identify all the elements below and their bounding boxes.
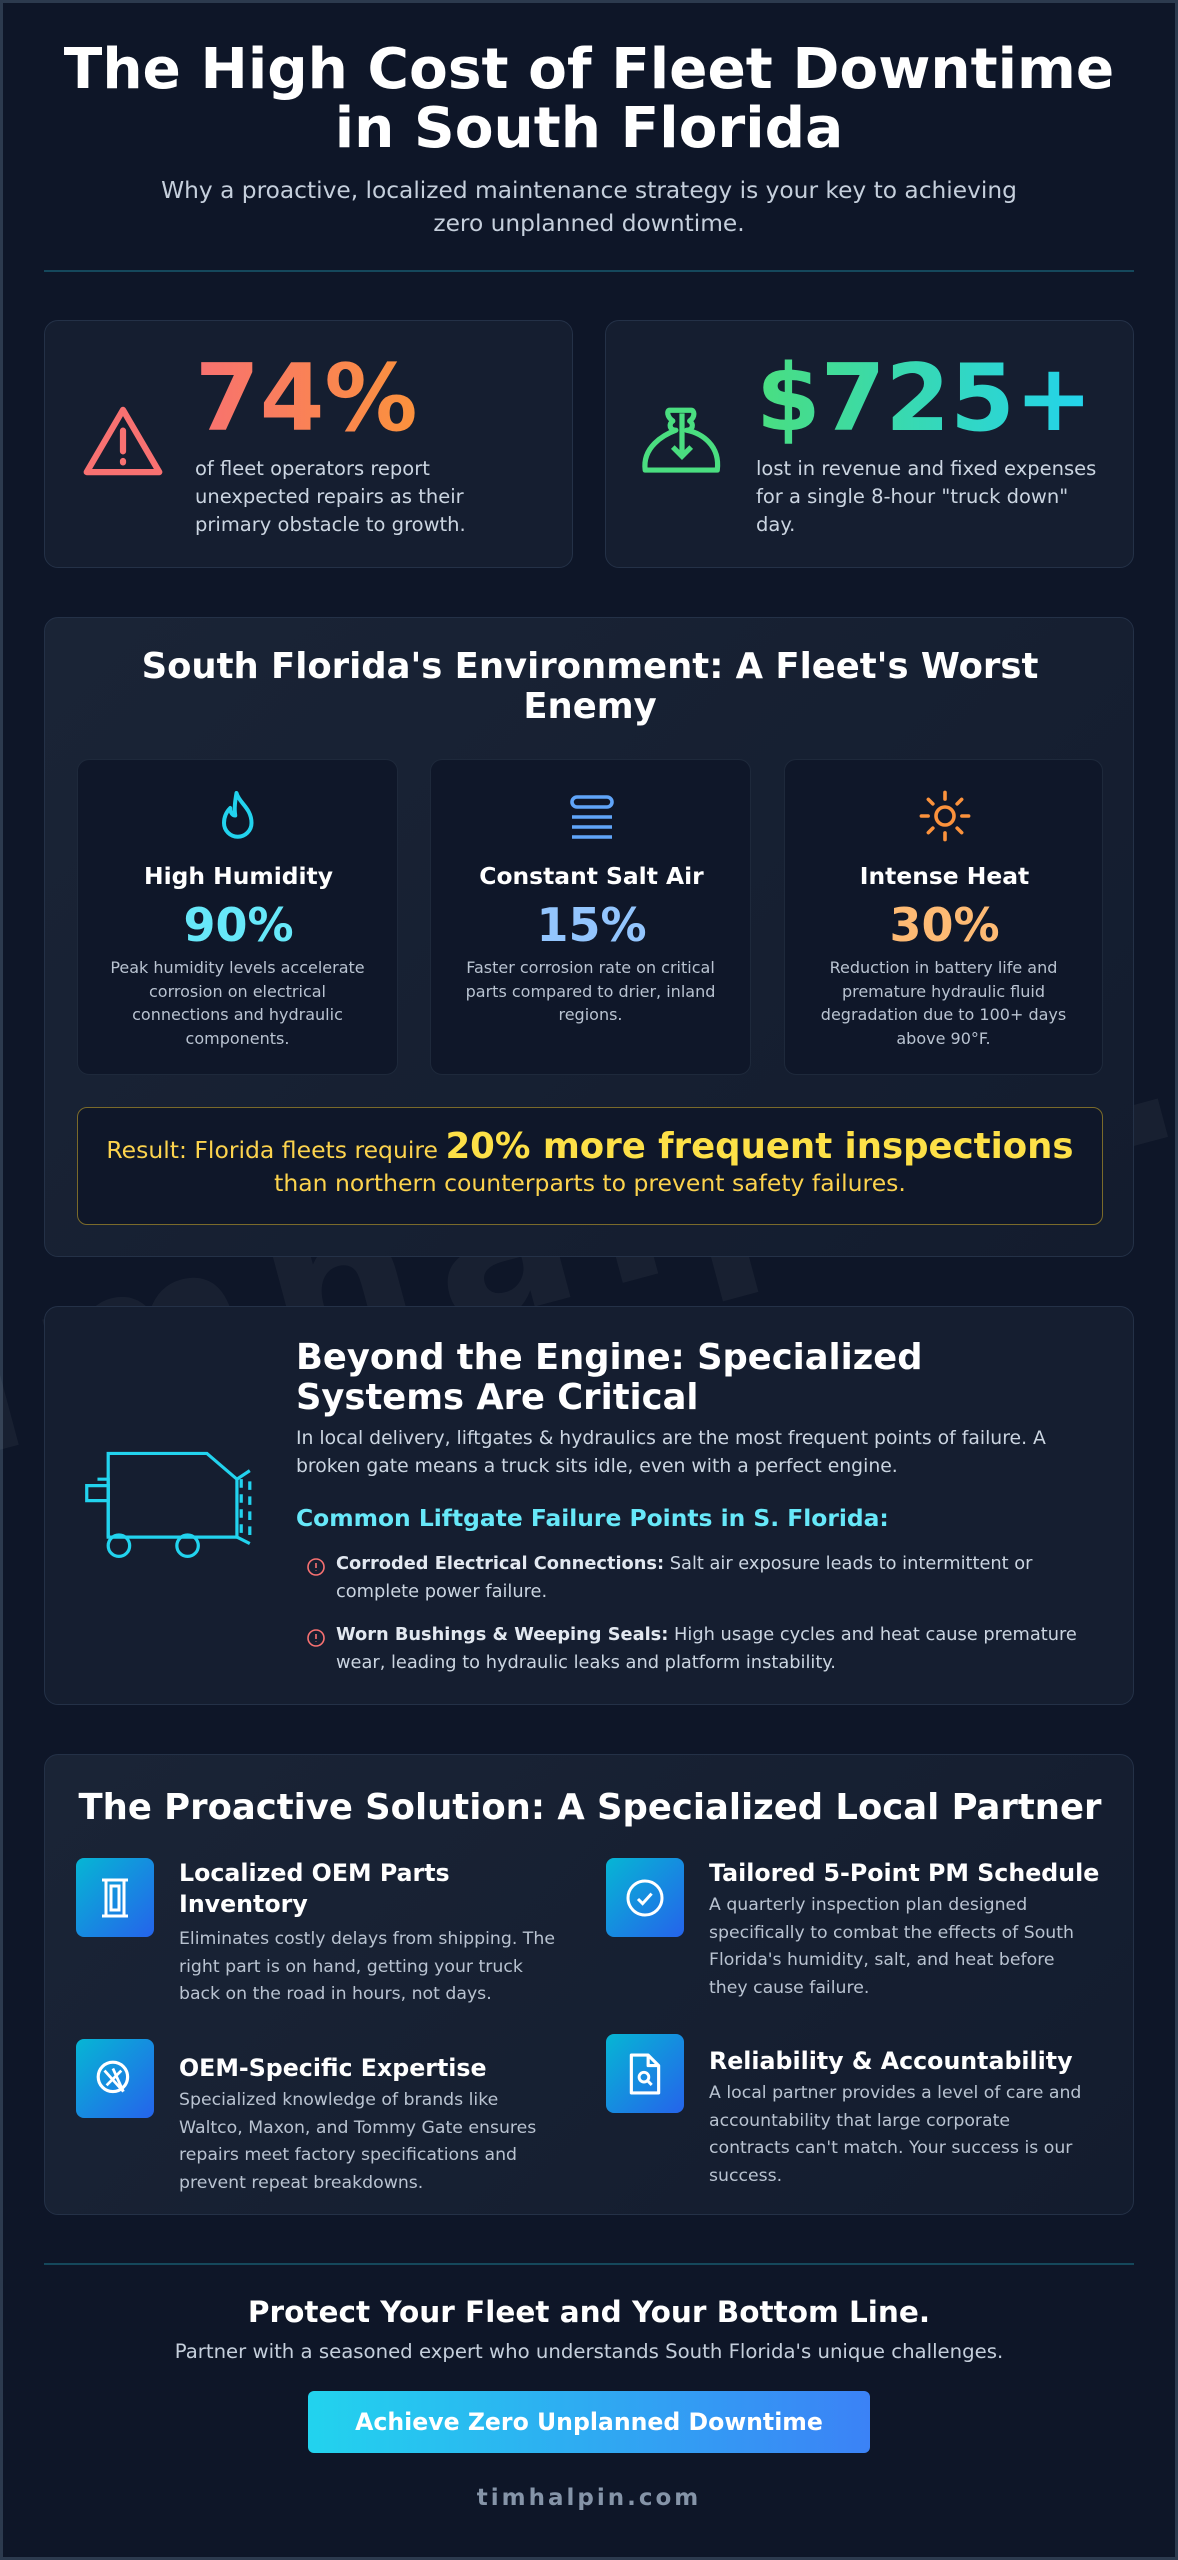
percent: 90% [183, 898, 294, 952]
description: Faster corrosion rate on critical parts compared to drier, inland regions. [466, 958, 715, 1024]
icon: layers [570, 795, 614, 839]
icon: check circle [606, 1858, 684, 1937]
stat text: for a single 8-hour "truck down" [756, 485, 1068, 508]
heading: Beyond the Engine: Specialized [296, 1337, 923, 1378]
item: OEM expertise: OEM-Specific Expertise [179, 2054, 487, 2082]
icon: truck with liftgate [85, 1452, 252, 1558]
bullet 2: Worn Bushings & Weeping Seals: High usage cycles and heat cause premature wear, leading to hydraulic leaks and platform instability. [336, 1624, 1077, 1672]
footer: timhalpin.com [477, 2485, 701, 2511]
item: OEM expertise: prevent repeat breakdowns. [179, 2173, 423, 2193]
icon: money bag [642, 408, 720, 473]
stat text: unexpected repairs as their [195, 485, 464, 508]
item: reliability: success. [709, 2166, 782, 2186]
percent: 30% [889, 898, 1000, 952]
CTA subtext: Partner with a seasoned expert who understands South Florida's unique challenges. [175, 2340, 1003, 2363]
item: parts inventory: Inventory [179, 1890, 308, 1918]
callout: result [77, 1107, 1103, 1225]
callout: result: Result: Florida fleets require 20% more frequent inspections [106, 1126, 1074, 1167]
description: Peak humidity levels accelerate corrosion on electrical connections and hydraulic components. [110, 958, 365, 1048]
label: High Humidity [144, 862, 333, 890]
item: parts inventory: back on the road in hours, not days. [179, 1984, 492, 2004]
subtitle: zero unplanned downtime. [433, 210, 745, 237]
callout: result: than northern counterparts to prevent safety failures. [274, 1169, 906, 1197]
panel: liftgates [44, 1306, 1134, 1705]
heading [142, 646, 1038, 727]
item: PM schedule: A quarterly inspection plan designed [709, 1895, 1027, 1915]
panel: environment [44, 617, 1134, 1257]
percent: 15% [536, 898, 647, 952]
icon: flame [222, 791, 254, 839]
title: The High Cost of Fleet Downtime [64, 37, 1114, 102]
CTA button: Achieve Zero Unplanned Downtime [355, 2408, 823, 2436]
label: Constant Salt Air [479, 862, 704, 890]
item: parts inventory: Eliminates costly delays from shipping. The [179, 1929, 555, 1949]
icon: door [76, 1858, 154, 1937]
subtitle [161, 177, 1017, 237]
stat text [195, 457, 466, 536]
title [64, 37, 1114, 161]
item: reliability: A local partner provides a level of care and [709, 2083, 1081, 2103]
item: PM schedule: specifically to combat the effects of South [709, 1923, 1074, 1943]
sub-card: humidity [77, 759, 398, 1075]
icon: document search [606, 2034, 684, 2113]
stat text: day. [756, 513, 795, 536]
item: reliability: Reliability & Accountability [709, 2047, 1073, 2075]
item: parts inventory [76, 1858, 555, 2004]
item: reliability: accountability that large corporate [709, 2111, 1010, 2131]
CTA heading: Protect Your Fleet and Your Bottom Line. [248, 2295, 930, 2329]
CTA button [308, 2391, 870, 2453]
panel: solution [44, 1754, 1134, 2215]
stat number: $725+ [756, 344, 1093, 452]
heading: Enemy [523, 686, 657, 727]
item: parts inventory: right part is on hand, getting your truck [179, 1957, 523, 1977]
stat number: 74% [195, 344, 418, 452]
description: Reduction in battery life and premature hydraulic fluid degradation due to 100+ days above 90°F. [821, 958, 1066, 1048]
item: OEM expertise [76, 2039, 536, 2193]
stat card: 74% [44, 320, 573, 568]
subtitle: Why a proactive, localized maintenance strategy is your key to achieving [161, 177, 1017, 204]
item: PM schedule: Tailored 5-Point PM Schedule [709, 1859, 1099, 1887]
item: OEM expertise: Specialized knowledge of brands like [179, 2090, 498, 2110]
subheading: Common Liftgate Failure Points in S. Florida: [296, 1504, 889, 1532]
stat text: primary obstacle to growth. [195, 513, 466, 536]
stat text: of fleet operators report [195, 457, 430, 480]
item: PM schedule: they cause failure. [709, 1978, 869, 1998]
heading: Systems Are Critical [296, 1377, 699, 1418]
icon: badge [76, 2039, 154, 2118]
item: PM schedule [606, 1858, 1099, 1998]
item: OEM expertise: Waltco, Maxon, and Tommy Gate ensures [179, 2118, 536, 2138]
sub-card: salt air [430, 759, 751, 1075]
heading: The Proactive Solution: A Specialized Local Partner [79, 1787, 1101, 1828]
stat text [756, 457, 1096, 536]
heading: South Florida's Environment: A Fleet's Worst [142, 646, 1038, 687]
description: In local delivery, liftgates & hydraulics are the most frequent points of failure. A broken gate means a truck sits idle, even with a perfect engine. [296, 1428, 1046, 1477]
item: parts inventory: Localized OEM Parts [179, 1859, 450, 1887]
stat text: lost in revenue and fixed expenses [756, 457, 1096, 480]
item: PM schedule: Florida's humidity, salt, and heat before [709, 1950, 1055, 1970]
title: in South Florida [335, 96, 843, 161]
sub-card: heat [784, 759, 1103, 1075]
item: reliability: contracts can't match. Your success is our [709, 2138, 1072, 2158]
bullet 1: Corroded Electrical Connections: Salt air exposure leads to intermittent or complete power failure. [336, 1553, 1032, 1602]
icon: sun [920, 790, 970, 842]
item: reliability [606, 2034, 1081, 2186]
icon: warning triangle [84, 406, 162, 476]
item: OEM expertise: repairs meet factory specifications and [179, 2145, 517, 2165]
label: Intense Heat [860, 862, 1029, 890]
heading [296, 1337, 923, 1418]
stat card: $725+ [605, 320, 1134, 568]
